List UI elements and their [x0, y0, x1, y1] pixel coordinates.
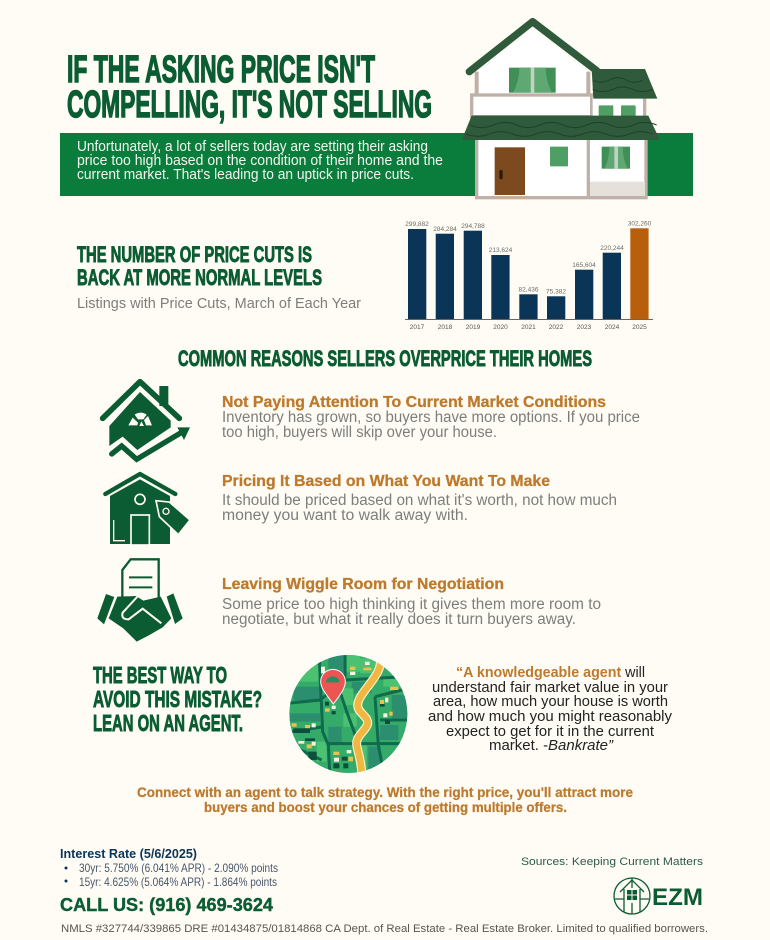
text: reason 2: [222, 473, 617, 524]
panel: intro banner: [60, 133, 693, 196]
bar chart: 2019: [466, 324, 481, 331]
bar chart: 2025: [632, 324, 647, 331]
text: reason 1: too high, buyers will skip over your house.: [222, 424, 497, 441]
sources: Sources: Keeping Current Matters: [521, 856, 704, 868]
bar chart: 2022: [549, 324, 564, 331]
heading: best way: [93, 662, 262, 736]
text: reason 2: It should be priced based on what it's worth, not how much: [222, 492, 617, 509]
text: reason 2: Pricing It Based on What You Want To Make: [222, 473, 550, 490]
bar chart: 302,260: [628, 220, 652, 228]
chart subtitle: Listings with Price Cuts, March of Each Year: [77, 295, 361, 312]
logo: EZM: EZM: [652, 884, 703, 911]
text: reason 3: [222, 576, 601, 628]
bar chart: 2018: [438, 324, 453, 331]
interest rates: 30yr: 5.750% (6.041% APR) - 2.090% points: [79, 861, 278, 875]
title: [67, 49, 432, 126]
bar chart: 284,284: [433, 226, 457, 233]
text: reason 2: money you want to walk away with.: [222, 507, 468, 524]
bar chart: 220,244: [600, 245, 624, 252]
bar chart: 299,882: [405, 221, 429, 228]
logo: EZM: [614, 878, 703, 914]
bar chart: [405, 220, 653, 331]
quote: area, how much your house is worth: [433, 694, 668, 710]
text: reason 1: Not Paying Attention To Current Market Conditions: [222, 394, 606, 411]
icon: map pin: [321, 669, 345, 704]
bar chart: 165,604: [572, 262, 596, 269]
heading: price cuts: [77, 242, 322, 290]
icon: map circle: [289, 655, 408, 773]
quote: [428, 665, 673, 754]
heading: price cuts: THE NUMBER OF PRICE CUTS IS: [77, 242, 312, 267]
heading: best way: AVOID THIS MISTAKE?: [93, 686, 262, 712]
bar chart: 2017: [410, 324, 425, 331]
icon: house illustration: [462, 22, 660, 198]
heading: best way: THE BEST WAY TO: [93, 662, 227, 688]
quote: and how much you might reasonably: [428, 709, 673, 725]
intro text: price too high based on the condition of their home and the: [77, 153, 443, 169]
bar chart: 2021: [521, 324, 536, 331]
icon: house with price tag: [105, 474, 190, 545]
quote: expect to get for it in the current: [446, 724, 654, 740]
interest rates: [60, 846, 278, 889]
quote: market. -Bankrate”: [489, 738, 614, 754]
interest rates: 15yr: 4.625% (5.064% APR) - 1.864% points: [79, 875, 277, 889]
text: reason 1: Inventory has grown, so buyers have more options. If you price: [222, 409, 640, 426]
icon: house with rising arrow: [103, 382, 190, 459]
intro text: Unfortunately, a lot of sellers today are setting their asking: [77, 139, 428, 155]
bar chart: 213,624: [489, 247, 513, 254]
heading: price cuts: BACK AT MORE NORMAL LEVELS: [77, 265, 322, 290]
call to action text: buyers and boost your chances of getting multiple offers.: [204, 800, 567, 815]
bar chart: 82,436: [519, 286, 539, 294]
phone number: CALL US: (916) 469-3624: [60, 895, 273, 915]
call to action text: [137, 785, 633, 815]
interest rates: Interest Rate (5/6/2025): [60, 846, 197, 861]
bar chart: 2024: [605, 324, 620, 331]
quote: understand fair market value in your: [432, 680, 668, 696]
title: IF THE ASKING PRICE ISN'T: [67, 49, 375, 91]
legal disclosure: NMLS #327744/339865 DRE #01434875/01814868 CA Dept. of Real Estate - Real Estate Broker. Limited to qualified borrowers.: [61, 923, 708, 935]
text: reason 3: Some price too high thinking it gives them more room to: [222, 596, 601, 613]
text: reason 3: Leaving Wiggle Room for Negotiation: [222, 576, 504, 593]
bar chart: 75,382: [546, 288, 566, 296]
intro text: current market. That's leading to an uptick in price cuts.: [77, 167, 414, 183]
text: reason 3: negotiate, but what it really does it turn buyers away.: [222, 611, 576, 628]
icon: handshake with document: [97, 559, 183, 642]
heading: best way: LEAN ON AN AGENT.: [93, 710, 243, 736]
title: COMPELLING, IT'S NOT SELLING: [67, 84, 432, 126]
bar chart: 294,788: [461, 223, 485, 230]
bar chart: 2020: [493, 324, 508, 331]
text: reason 1: [222, 394, 640, 441]
intro text: [77, 139, 443, 183]
quote: “A knowledgeable agent will: [456, 665, 645, 681]
bar chart: 2023: [577, 324, 592, 331]
call to action text: Connect with an agent to talk strategy. With the right price, you'll attract more: [137, 785, 633, 800]
